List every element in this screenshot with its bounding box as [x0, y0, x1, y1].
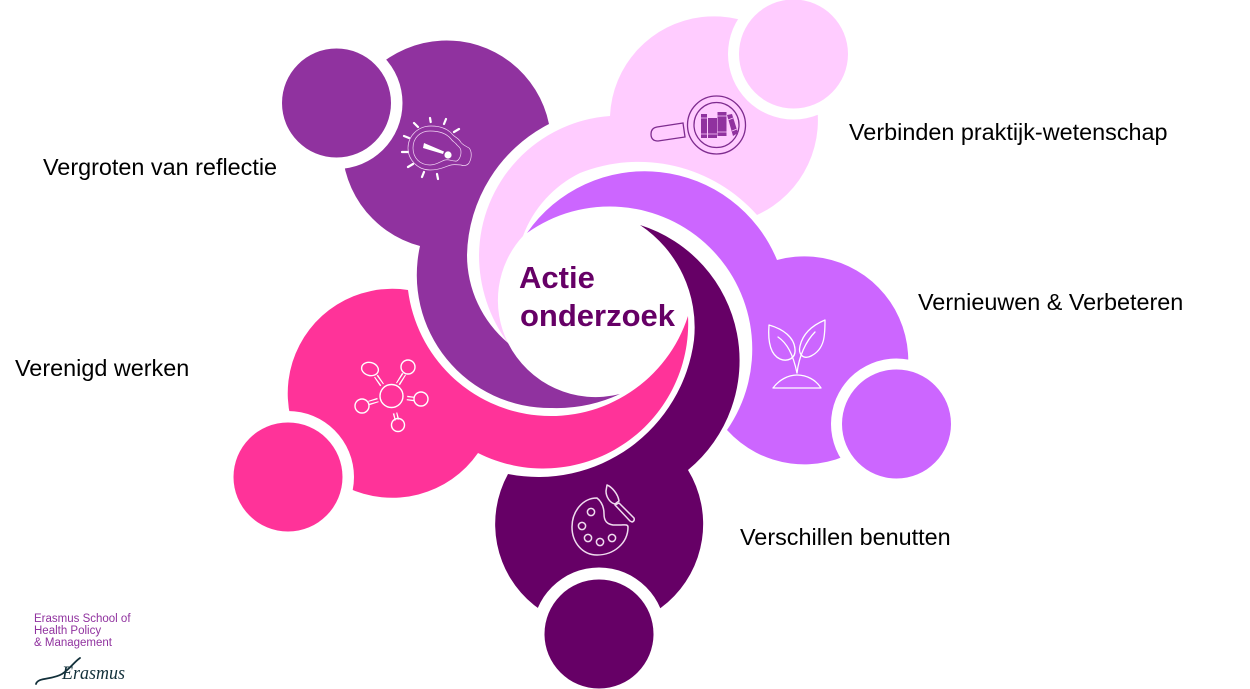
icon: network — [355, 360, 428, 432]
panel: Verenigd werken petal — [222, 289, 688, 543]
panel: Verschillen benutten petal — [495, 225, 740, 689]
logo: Erasmus School of Health Policy & Management: Erasmus School of — [34, 613, 131, 625]
logo: Erasmus School of Health Policy & Management: Health Policy — [34, 625, 101, 637]
panel: Verbinden praktijk-wetenschap petal — [479, 0, 859, 343]
label: Verschillen benutten: Verschillen benutten — [740, 524, 951, 550]
icon: palette and brush — [572, 485, 634, 555]
panel: Vernieuwen & Verbeteren petal — [527, 171, 962, 489]
panel: Vergroten van reflectie petal — [270, 37, 620, 408]
icon: magnifier with books — [651, 96, 746, 154]
label: Vernieuwen & Verbeteren: Vernieuwen & Verbeteren — [918, 289, 1183, 315]
label: Vergroten van reflectie: Vergroten van reflectie — [43, 154, 277, 180]
logo: Erasmus School of Health Policy & Management: & Management — [34, 637, 113, 649]
title: Actie onderzoek: onderzoek — [520, 298, 676, 333]
logo: Erasmus School of Health Policy & Management — [34, 613, 131, 684]
logo: Erasmus School of Health Policy & Management: Erasmus — [61, 663, 125, 684]
title: Actie onderzoek: Actie — [519, 260, 595, 295]
label: Verbinden praktijk-wetenschap: Verbinden praktijk-wetenschap — [849, 119, 1168, 145]
icon: sprout — [769, 320, 825, 388]
label: Verenigd werken: Verenigd werken — [15, 355, 189, 381]
icon: light bulb — [402, 118, 471, 179]
